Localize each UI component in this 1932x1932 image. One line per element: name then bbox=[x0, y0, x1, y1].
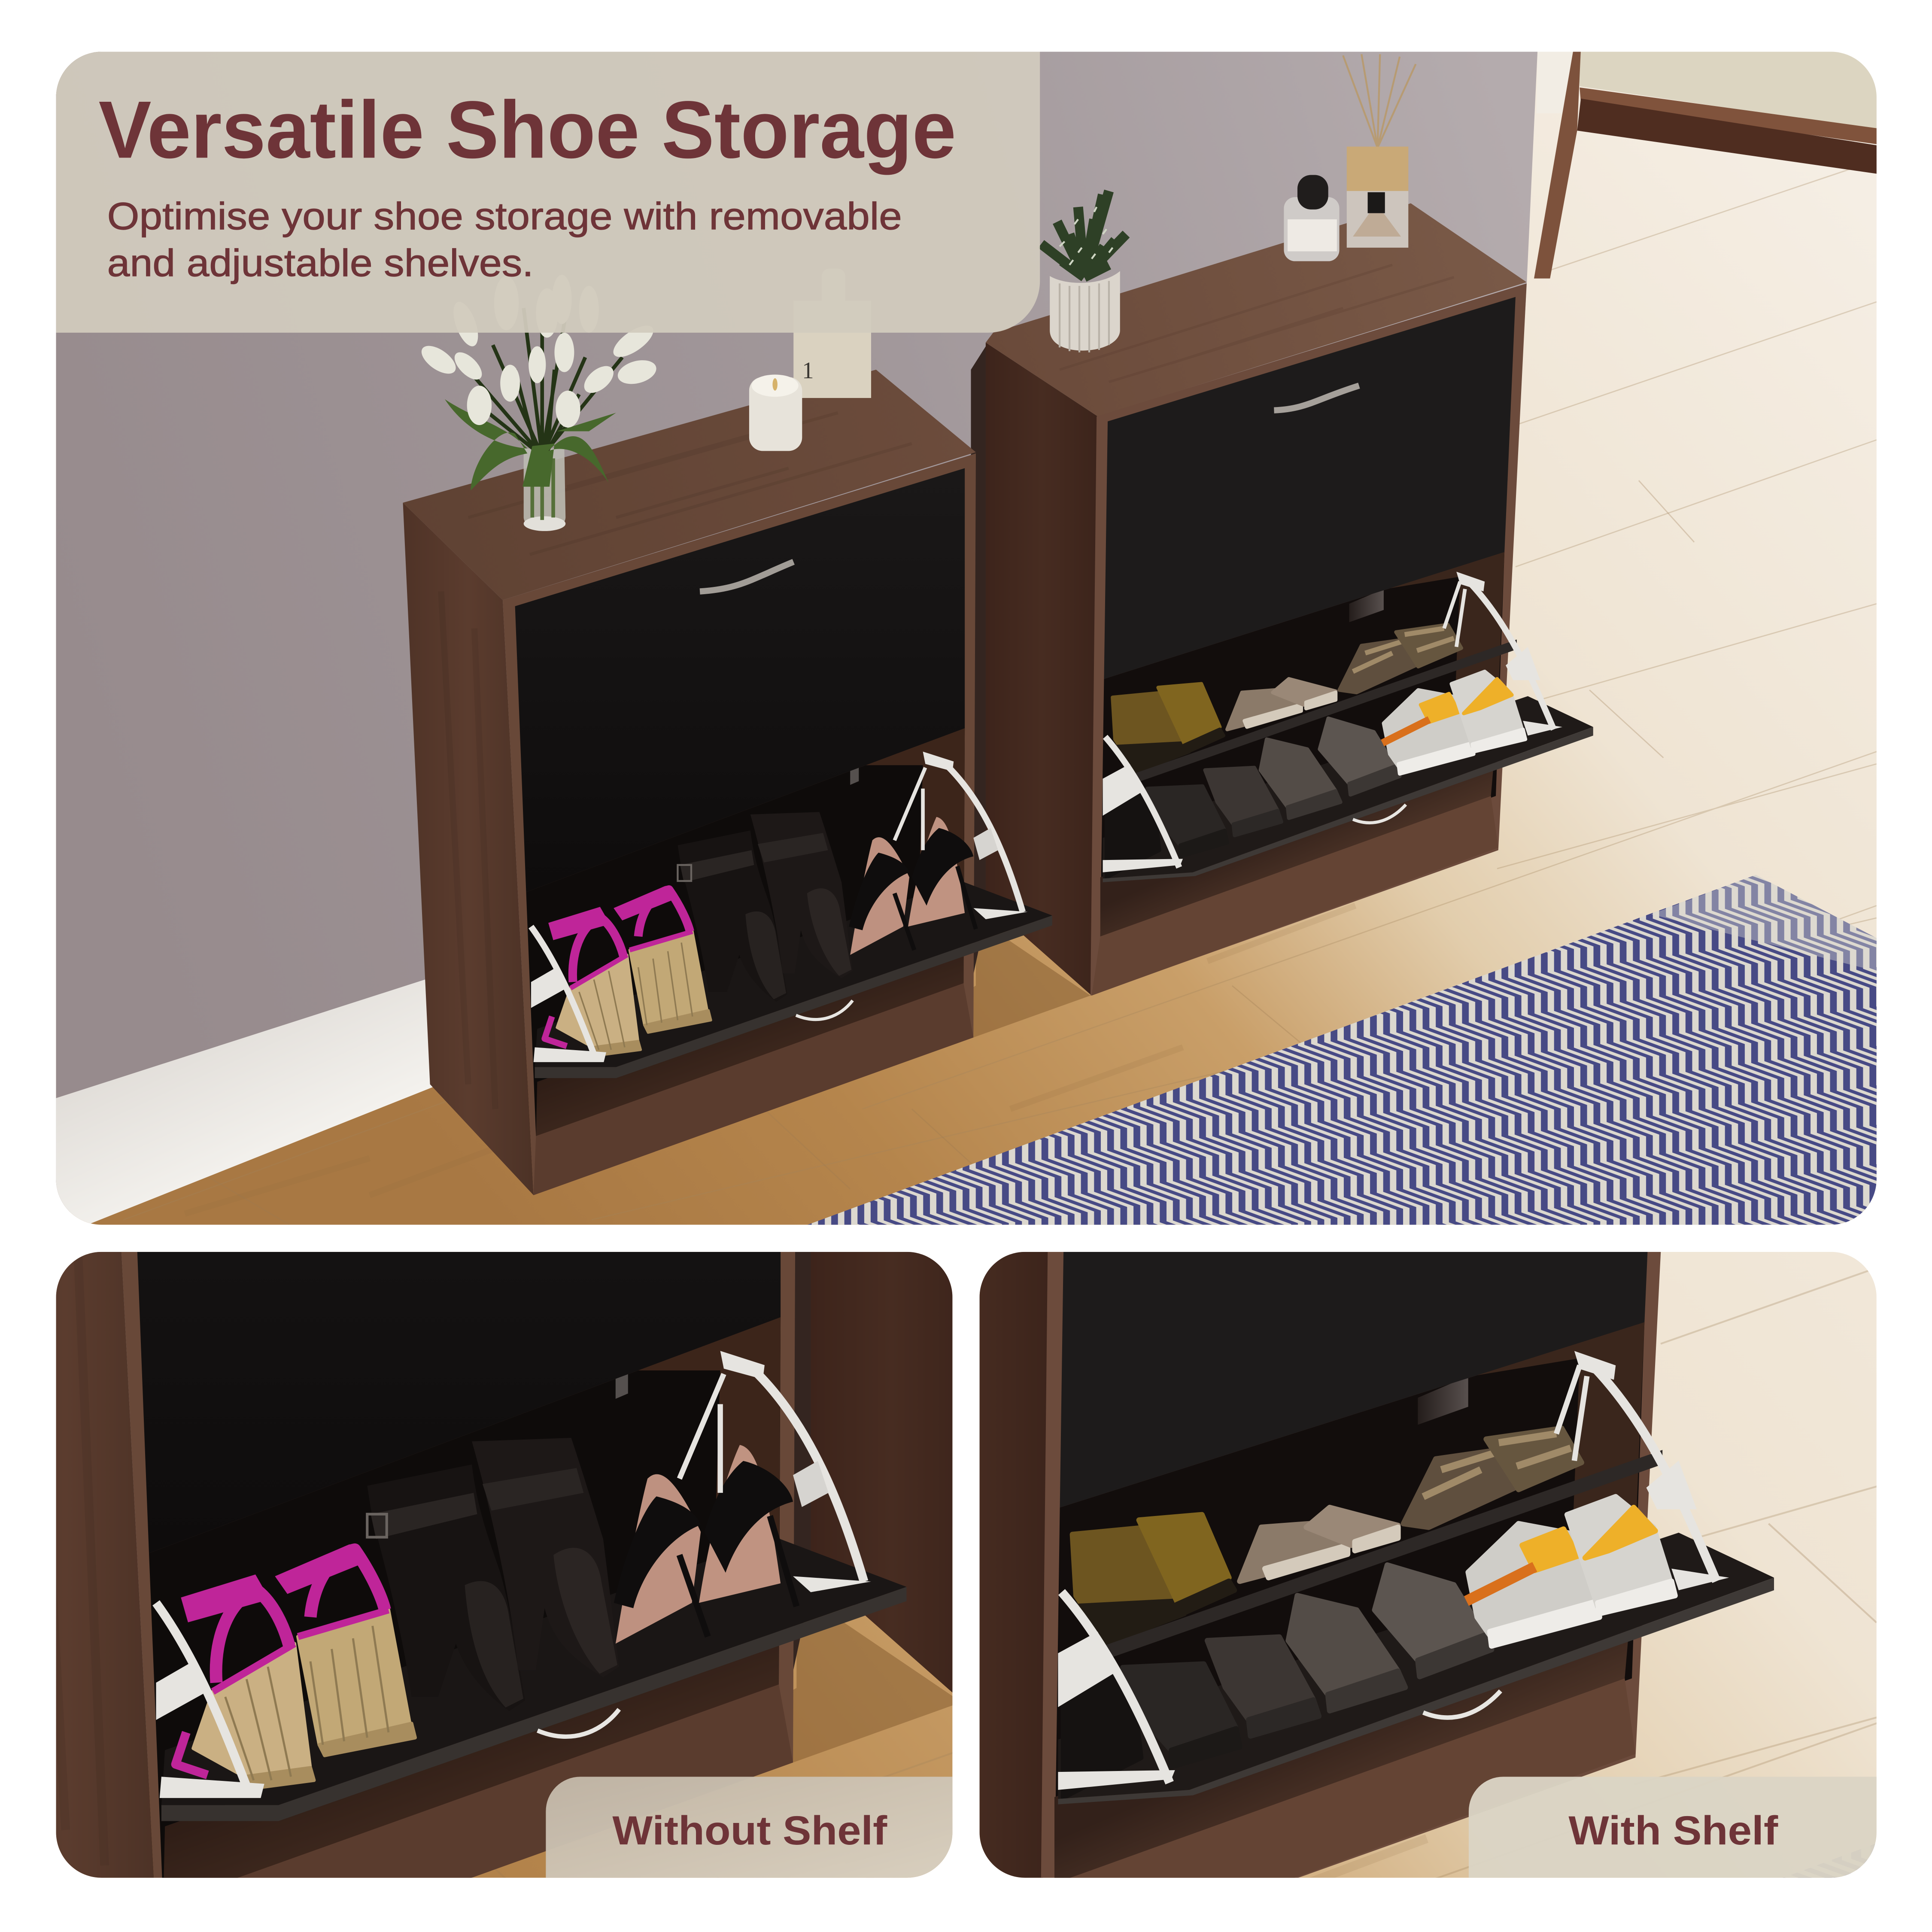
cabinet 2 white strap bbox=[1353, 805, 1406, 823]
decor on cabinet 1 bbox=[417, 269, 871, 531]
cabinet 1 flap lip bbox=[535, 915, 1052, 1078]
label: with shelf: With Shelf bbox=[1568, 1808, 1778, 1853]
lily bouquet in glass vase bbox=[417, 275, 659, 531]
label: without shelf bbox=[546, 1777, 952, 1878]
cabinet 2 side panel bbox=[986, 343, 1098, 996]
cabinet 1 side panel bbox=[403, 503, 534, 1195]
cabinet 2 cavity bbox=[1100, 552, 1504, 936]
cabinet 2 left bracket bbox=[1103, 737, 1183, 872]
decor on cabinet 2 bbox=[1041, 54, 1416, 352]
cabinet 1 right bracket bbox=[895, 752, 1027, 919]
cabinet 2 base gap bbox=[1100, 739, 1496, 936]
cabinet 1 base gap bbox=[536, 930, 963, 1136]
cabinet 2 right bracket bbox=[1444, 572, 1562, 735]
cabinet 2 interior shelf bbox=[1133, 639, 1517, 784]
cabinet 1 white strap bbox=[796, 1000, 853, 1020]
title banner bbox=[56, 52, 1040, 333]
black ankle boots bbox=[677, 812, 853, 1002]
cabinet 1 bbox=[403, 370, 1052, 1195]
subtitle bbox=[107, 194, 902, 284]
cabinet 2 door bbox=[1104, 297, 1516, 679]
cabinet 1 left bracket bbox=[531, 927, 606, 1062]
cabinet 1 door bbox=[515, 468, 965, 892]
cabinet 1 base plank bbox=[534, 983, 973, 1195]
perfume box bottle bbox=[793, 269, 871, 398]
cabinet 2 bbox=[986, 204, 1593, 996]
label: without shelf: Without Shelf bbox=[612, 1808, 887, 1853]
skirting board bbox=[49, 978, 434, 1232]
cabinet 2 base plank bbox=[1092, 796, 1498, 996]
reed diffuser bbox=[1343, 54, 1416, 248]
candle bbox=[749, 374, 802, 451]
cabinet 1 frame bbox=[503, 453, 976, 1195]
subtitle: and adjustable shelves. bbox=[107, 241, 534, 284]
cabinet 2 top bbox=[986, 204, 1527, 416]
pink and black stiletto heels bbox=[849, 817, 976, 955]
cabinet 2 frame bbox=[1091, 283, 1527, 996]
subtitle: Optimise your shoe storage with removable bbox=[107, 194, 902, 237]
shadow between cabinets bbox=[971, 343, 988, 986]
cabinet 2 flap surface bbox=[1103, 696, 1593, 878]
cabinet 2 upper shoes bbox=[1113, 625, 1461, 774]
label: with shelf bbox=[1469, 1777, 1877, 1878]
cabinet 2 flap lip bbox=[1103, 727, 1593, 882]
cabinet 1 handle bbox=[700, 562, 793, 592]
cabinet 1 top bbox=[403, 370, 976, 600]
title: Versatile Shoe Storage bbox=[99, 85, 956, 175]
panel: main room scene bbox=[49, 44, 1885, 1232]
panel: with shelf close-up bbox=[0, 581, 1932, 1932]
cabinet 1 cavity bbox=[526, 728, 965, 1136]
pink wedge sandals bbox=[544, 886, 711, 1056]
floor bbox=[55, 52, 1879, 1227]
perfume bottle bbox=[1284, 175, 1340, 261]
chair bbox=[1534, 44, 1885, 279]
rug bbox=[801, 875, 1885, 1227]
wall bbox=[49, 47, 1538, 1220]
cabinet 2 lower shoes bbox=[1106, 671, 1525, 877]
cabinet 1 flap surface bbox=[535, 881, 1052, 1067]
perfume box bottle: 1 bbox=[802, 357, 814, 383]
cabinet 2 handle bbox=[1274, 386, 1359, 410]
plant in white pot bbox=[1041, 191, 1126, 352]
